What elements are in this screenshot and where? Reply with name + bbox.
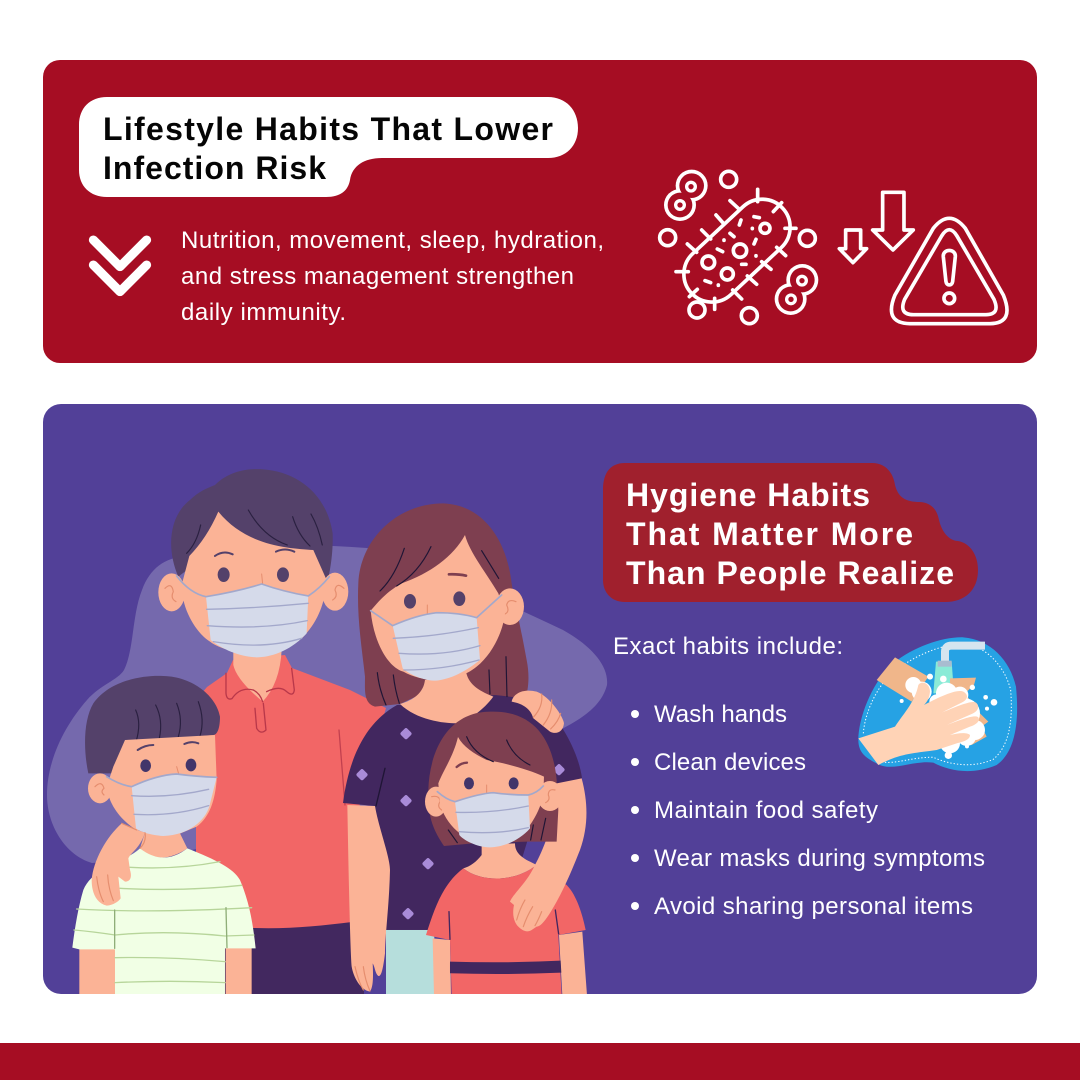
girl hair bbox=[428, 712, 558, 846]
list item: personal items: Avoid sharing personal items bbox=[654, 893, 973, 920]
panel: lifestyle habits bbox=[43, 60, 1037, 363]
woman face bbox=[371, 535, 505, 680]
footer bar bbox=[0, 1043, 1080, 1080]
woman jeans bbox=[386, 925, 434, 995]
list: hygiene habits bbox=[631, 701, 985, 920]
background blob bbox=[47, 545, 607, 863]
heading: lifestyle habits: Infection Risk bbox=[103, 150, 326, 186]
list item: clean devices: Clean devices bbox=[654, 749, 806, 776]
boy neck bbox=[140, 833, 187, 857]
icon: double chevron bbox=[93, 240, 147, 292]
boy face bbox=[107, 735, 217, 835]
girl shirt bbox=[426, 865, 586, 995]
boy arms bbox=[79, 947, 252, 995]
man hair bbox=[171, 469, 333, 584]
man shirt bbox=[196, 655, 386, 928]
text: lifestyle description: Nutrition, movement, sleep, hydration, bbox=[181, 227, 604, 254]
man bbox=[158, 469, 386, 994]
girl bbox=[386, 712, 587, 995]
girl mask bbox=[455, 793, 530, 847]
icon: small down arrow bbox=[839, 230, 867, 263]
woman left arm bbox=[347, 805, 390, 992]
boy shirt bbox=[72, 848, 256, 995]
woman hair bbox=[358, 503, 528, 707]
heading: hygiene habits: Hygiene Habits bbox=[626, 477, 870, 513]
man trousers bbox=[225, 922, 364, 994]
boy hair bbox=[85, 676, 220, 773]
girl face bbox=[438, 737, 544, 847]
heading: lifestyle habits: Lifestyle Habits That Lower bbox=[103, 111, 553, 147]
heading: lifestyle habits bbox=[79, 97, 578, 197]
icon: warning triangle bbox=[891, 218, 1007, 324]
woman right arm bbox=[510, 778, 586, 931]
text: lifestyle description: and stress management strengthen bbox=[181, 263, 574, 290]
text: list intro: Exact habits include: bbox=[613, 633, 843, 660]
woman ear bbox=[496, 588, 524, 625]
boy mask bbox=[132, 774, 217, 836]
text: lifestyle description: daily immunity. bbox=[181, 299, 346, 326]
man ears bbox=[158, 573, 185, 611]
list item: masks: Wear masks during symptoms bbox=[654, 845, 985, 872]
woman neck bbox=[400, 672, 493, 723]
text: lifestyle description bbox=[181, 227, 604, 326]
girl ears bbox=[425, 786, 444, 817]
heading: hygiene habits: That Matter More bbox=[626, 516, 913, 552]
illustration: family in masks bbox=[47, 469, 607, 995]
woman shirt bbox=[343, 695, 582, 930]
woman hand bbox=[512, 691, 564, 733]
man neck bbox=[233, 650, 282, 702]
heading: hygiene habits: Than People Realize bbox=[626, 555, 954, 591]
icon: hand washing bbox=[858, 637, 1017, 771]
list item: food safety: Maintain food safety bbox=[654, 797, 878, 824]
list item: wash hands: Wash hands bbox=[654, 701, 787, 728]
boy bbox=[72, 676, 256, 995]
man arm on boy bbox=[92, 823, 145, 906]
man face bbox=[182, 512, 327, 653]
man mask bbox=[206, 584, 308, 657]
panel: hygiene habits bbox=[43, 404, 1037, 995]
girl arms bbox=[433, 932, 587, 995]
woman mask bbox=[393, 613, 480, 681]
boy ear bbox=[88, 773, 112, 803]
icon: large down arrow bbox=[873, 192, 913, 250]
woman bbox=[343, 503, 582, 995]
girl neck bbox=[463, 843, 537, 879]
icon: bacteria bbox=[660, 170, 818, 324]
heading: hygiene habits bbox=[603, 463, 978, 602]
girl jeans backdrop bbox=[386, 930, 434, 938]
